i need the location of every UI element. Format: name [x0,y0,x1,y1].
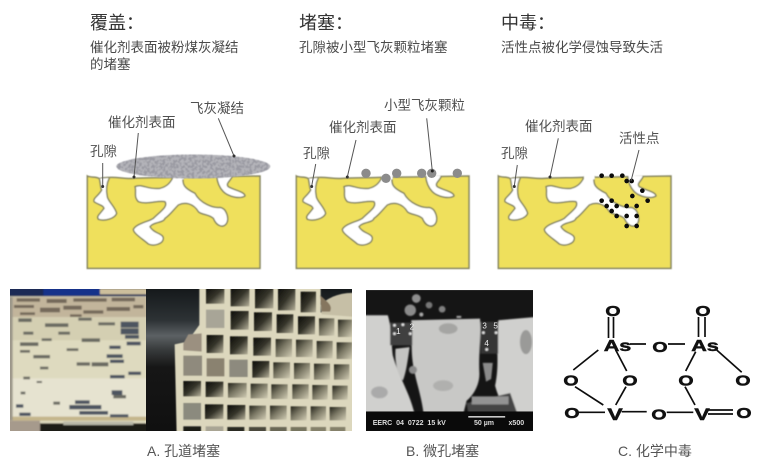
pore point labels: 5 [493,322,498,331]
label: 活性点 [619,131,660,181]
pore point labels: 3 [482,322,487,331]
active sites [599,173,650,228]
pore point labels: 4 [484,339,489,348]
heading: 堵塞: 堵塞： [299,13,353,33]
catalyst body with pores [498,175,671,268]
heading: 覆盖: 覆盖： [90,13,144,33]
atoms: O [695,302,711,319]
bonds [573,317,742,414]
caption B: B. 微孔堵塞 [406,443,479,459]
photo A right: honeycomb catalyst [146,289,352,431]
label: 催化剂表面: 催化剂表面 [329,120,396,135]
label: 催化剂表面: 催化剂表面 [525,119,592,134]
text block: 堵塞 description: 孔隙被小型飞灰颗粒堵塞 [299,39,448,55]
fly ash deposit ellipse [116,154,270,178]
atoms: O [563,372,579,389]
label: 催化剂表面 [329,120,396,178]
panel: 堵塞 diagram [296,98,469,268]
atoms: V [607,406,623,424]
label: 孔隙: 孔隙 [303,146,330,161]
panel: 中毒 diagram [498,119,671,268]
pore point labels [396,322,498,348]
atoms: As [691,338,719,355]
atoms: O [735,372,751,389]
pore point labels: 1 [396,327,401,336]
atoms: As [604,338,631,355]
text block: 覆盖 description [90,40,238,72]
atoms: O [622,372,638,389]
panel: 覆盖 diagram [87,101,270,268]
heading: 中毒: 中毒： [501,13,555,33]
text block: 覆盖 description: 催化剂表面被粉煤灰凝结 [90,40,238,55]
atoms [563,302,752,424]
catalyst body with pores [296,175,469,268]
caption C: C. 化学中毒 [618,443,692,459]
label: 孔隙: 孔隙 [90,144,117,159]
text block: 中毒 description: 活性点被化学侵蚀导致失活 [501,39,663,55]
small fly ash particles [361,169,462,183]
chemical structure: arsenic poisoning of vanadium [563,302,752,424]
text block: 覆盖 description: 的堵塞 [90,56,131,72]
scale bar and caption strip: 50 µm [474,420,494,427]
atoms: O [605,302,621,319]
label: 小型飞灰颗粒: 小型飞灰颗粒 [384,98,465,113]
label: 催化剂表面 [525,119,592,178]
label: 孔隙 [501,146,528,188]
scale bar and caption strip: x500 [509,420,524,427]
label: 飞灰凝结 [190,101,244,158]
catalyst body with pores [87,175,260,268]
scale bar and caption strip: EERC 04 0722 15 kV [373,420,446,427]
scale bar and caption strip [366,411,533,431]
atoms: O [652,338,668,355]
label: 活性点: 活性点 [619,131,660,146]
photo A left: fouled catalyst face [10,289,146,431]
label: 孔隙: 孔隙 [501,146,528,161]
label: 孔隙 [90,144,117,188]
atoms: O [736,404,752,421]
photo B: SEM micrograph of blocked micropores [366,290,533,431]
caption A: A. 孔道堵塞 [147,443,220,459]
pore point labels: 2 [410,322,415,331]
atoms: O [564,404,580,421]
label: 孔隙 [303,146,330,188]
atoms: O [651,406,667,423]
atoms: O [678,372,694,389]
label: 催化剂表面: 催化剂表面 [108,115,176,130]
label: 小型飞灰颗粒 [384,98,465,172]
label: 催化剂表面 [108,115,176,178]
label: 飞灰凝结: 飞灰凝结 [190,101,244,116]
atoms: V [694,406,710,424]
